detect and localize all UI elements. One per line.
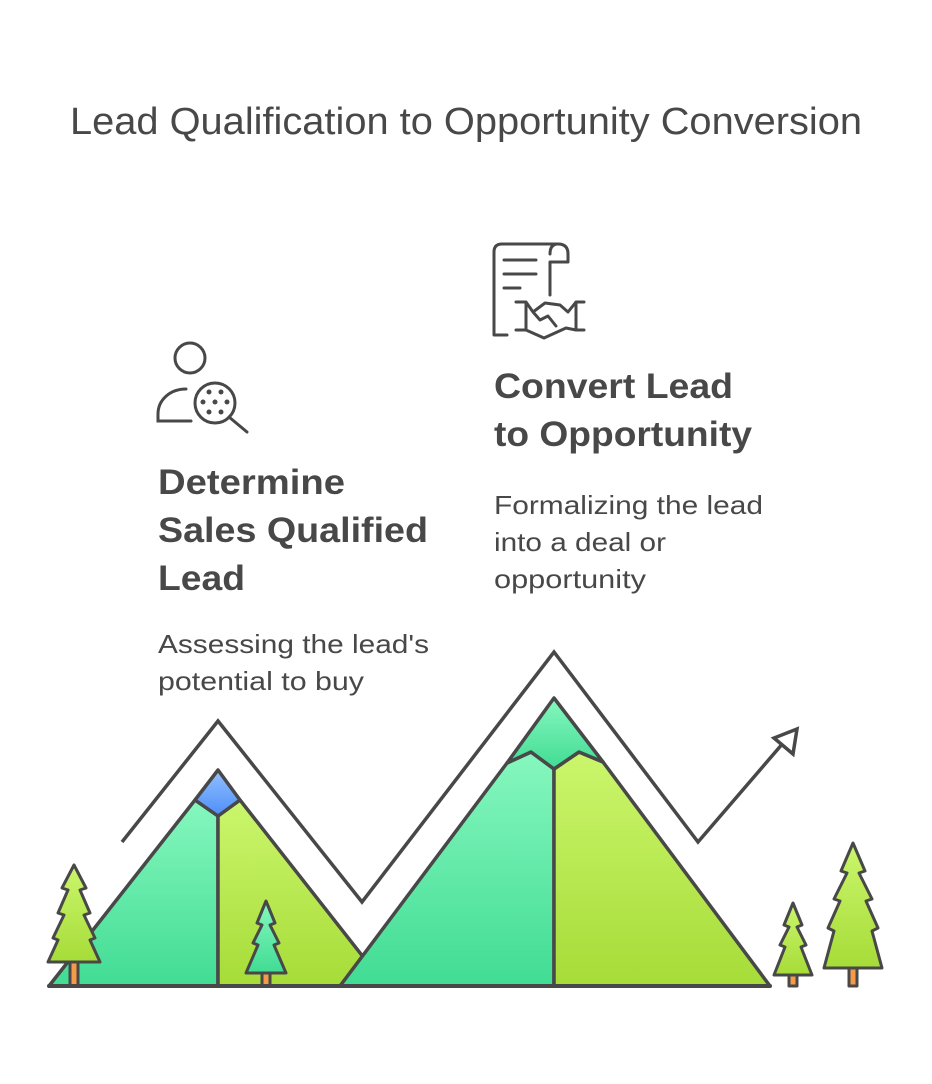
mountain: large (340, 698, 770, 986)
heading: Convert Lead to Opportunity (494, 367, 753, 454)
text: assessing (158, 629, 429, 696)
icon: person search (158, 343, 247, 432)
title: Lead Qualification to Opportunity Conversion (70, 101, 862, 143)
text: formalizing: opportunity (494, 564, 646, 594)
icon: contract handshake (494, 244, 584, 338)
icon: trees (48, 843, 882, 986)
text: assessing: potential to buy (158, 666, 364, 696)
text: formalizing (494, 490, 763, 594)
text: formalizing: Formalizing the lead (494, 490, 763, 520)
ground line (49, 984, 770, 988)
arrow: zigzag trend line (122, 652, 797, 902)
heading: Convert Lead to Opportunity: to Opportunity (494, 415, 753, 454)
heading: Determine Sales Qualified Lead: Lead (158, 559, 245, 598)
heading: Determine Sales Qualified Lead: Sales Qualified (158, 511, 428, 550)
mountain: small (49, 770, 386, 986)
text: formalizing: into a deal or (494, 527, 666, 557)
heading: Convert Lead to Opportunity: Convert Lead (494, 367, 733, 406)
heading: Determine Sales Qualified Lead: Determine (158, 463, 345, 502)
text: assessing: Assessing the lead's (158, 629, 429, 659)
heading: Determine Sales Qualified Lead (158, 463, 428, 598)
